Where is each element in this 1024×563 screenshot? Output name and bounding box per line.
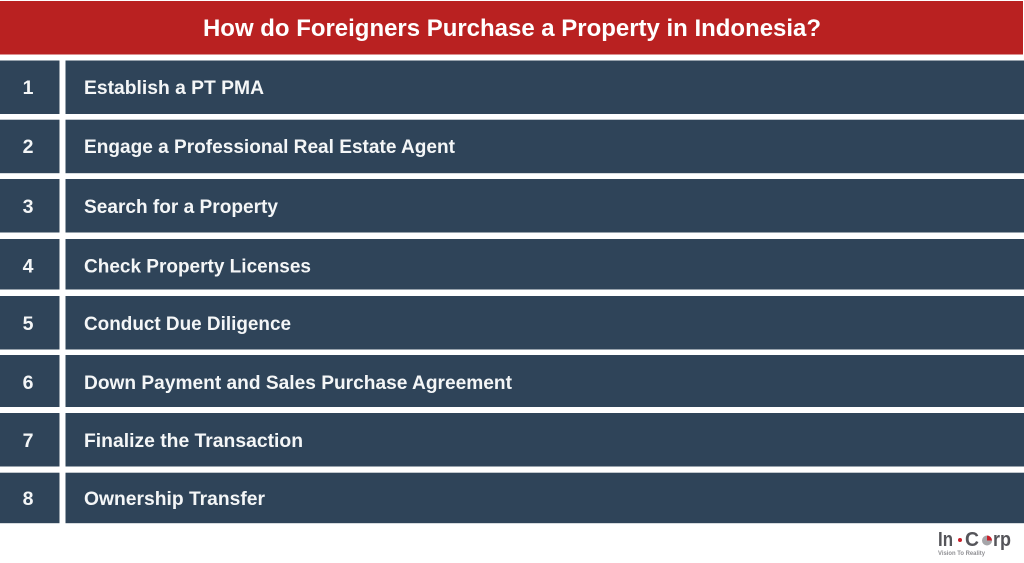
step 2: Engage a Professional Real Estate Agent [84, 136, 455, 158]
logo: InCorp: In [938, 529, 953, 551]
logo: InCorp: C [965, 529, 979, 551]
step 2 [0, 120, 1024, 173]
step 4: Check Property Licenses [84, 256, 311, 278]
step 3: 3 [23, 196, 34, 218]
step 5 [0, 296, 1024, 350]
step 3 [0, 179, 1024, 232]
step 7: 7 [23, 430, 33, 452]
step 6: 6 [23, 372, 34, 394]
step 8 [0, 473, 1024, 523]
step 4: 4 [23, 256, 34, 278]
title banner [0, 1, 1023, 54]
step 4 [0, 239, 1024, 290]
step 5: 5 [23, 313, 34, 335]
step 6: Down Payment and Sales Purchase Agreement [84, 372, 512, 394]
logo: InCorp: rp [993, 529, 1011, 551]
icon: globe letter o [982, 536, 992, 546]
step 1: 1 [23, 77, 34, 99]
logo: InCorp [938, 529, 1011, 557]
title banner: How do Foreigners Purchase a Property in Indonesia? [203, 15, 821, 42]
step 6 [0, 355, 1024, 407]
step 1: Establish a PT PMA [84, 77, 264, 99]
logo: InCorp: Vision To Reality [938, 550, 985, 557]
step 1 [0, 60, 1024, 114]
step 8: Ownership Transfer [84, 488, 265, 510]
step 2: 2 [23, 136, 34, 158]
step 7: Finalize the Transaction [84, 430, 303, 452]
step 7 [0, 413, 1024, 466]
step 3: Search for a Property [84, 196, 278, 218]
step 8: 8 [23, 488, 34, 510]
step 5: Conduct Due Diligence [84, 313, 291, 335]
